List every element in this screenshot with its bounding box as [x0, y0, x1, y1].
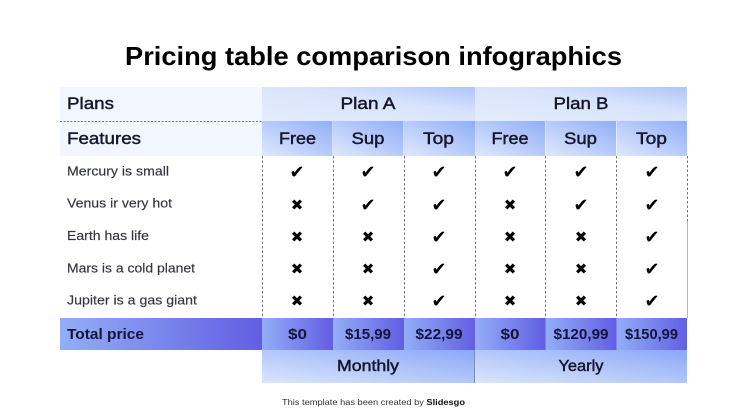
panel: row headers	[60, 87, 262, 156]
icons: check and cross marks: ✔	[360, 195, 376, 216]
feature labels: Jupiter is a gas giant	[67, 292, 197, 308]
panel: total price row: $150,99	[625, 326, 678, 343]
icons: check and cross marks: ✔	[644, 291, 660, 312]
icons: check and cross marks: ✔	[644, 227, 660, 248]
tier headers: Top	[636, 129, 667, 148]
tier headers: Top	[423, 129, 454, 148]
tier headers: Sup	[352, 129, 384, 148]
icons: check and cross marks: ✖	[362, 292, 374, 310]
icons: check and cross marks: ✔	[502, 162, 518, 183]
icons: check and cross marks: ✖	[575, 260, 587, 278]
icons: check and cross marks: ✔	[431, 291, 447, 312]
feature labels: Mercury is small	[67, 164, 169, 178]
panel: monthly billing	[262, 350, 475, 383]
icons: check and cross marks: ✖	[291, 196, 303, 214]
feature labels: Venus ir very hot	[67, 196, 172, 210]
panel: total price row	[60, 318, 687, 350]
panel: total price row: Total price	[67, 326, 144, 343]
icons: check and cross marks: ✖	[575, 228, 587, 246]
feature labels: Earth has life	[67, 228, 149, 243]
heading: features: Features	[67, 129, 141, 148]
icons: check and cross marks: ✖	[504, 196, 516, 214]
panel: yearly billing	[475, 350, 687, 383]
icons: check and cross marks: ✖	[291, 292, 303, 310]
icons: check and cross marks: ✖	[362, 228, 374, 246]
icons: check and cross marks: ✔	[289, 162, 305, 183]
panel: plan B header: Plan B	[554, 94, 608, 113]
icons: check and cross marks: ✖	[504, 228, 516, 246]
heading: plans: Plans	[67, 94, 114, 113]
panel: yearly billing: Yearly	[558, 358, 604, 375]
icons: check and cross marks: ✔	[644, 259, 660, 280]
panel: total price row: $0	[288, 326, 307, 343]
tier headers	[262, 121, 687, 156]
feature labels: Mars is a cold planet	[67, 260, 195, 276]
footer credit: This template has been created by Slidesgo	[282, 397, 465, 407]
panel: total price row: $120,99	[554, 326, 608, 343]
title: Pricing table comparison infographics	[125, 41, 622, 71]
icons: check and cross marks: ✔	[573, 195, 589, 216]
icons: check and cross marks: ✔	[573, 162, 589, 183]
icons: check and cross marks: ✖	[291, 228, 303, 246]
icons: check and cross marks: ✖	[575, 292, 587, 310]
icons: check and cross marks: ✖	[504, 260, 516, 278]
icons: check and cross marks: ✔	[644, 195, 660, 216]
tier headers: Free	[492, 129, 528, 148]
panel: plan B header	[475, 87, 687, 121]
tier headers: Free	[279, 129, 316, 148]
icons: check and cross marks	[289, 162, 660, 312]
icons: check and cross marks: ✔	[431, 162, 447, 183]
tier headers: Sup	[564, 129, 597, 148]
panel: monthly billing: Monthly	[337, 358, 399, 375]
icons: check and cross marks: ✔	[431, 259, 447, 280]
icons: check and cross marks: ✔	[431, 195, 447, 216]
icons: check and cross marks: ✔	[360, 162, 376, 183]
panel: total price row: $15,99	[345, 326, 391, 343]
icons: check and cross marks: ✖	[362, 260, 374, 278]
icons: check and cross marks: ✖	[504, 292, 516, 310]
panel: plan A header	[262, 87, 475, 121]
feature labels	[67, 164, 197, 308]
icons: check and cross marks: ✖	[291, 260, 303, 278]
icons: check and cross marks: ✔	[644, 162, 660, 183]
panel: total price row: $0	[500, 326, 520, 343]
panel: total price row: $22,99	[416, 326, 462, 343]
icons: check and cross marks: ✔	[431, 227, 447, 248]
panel: plan A header: Plan A	[340, 94, 396, 113]
